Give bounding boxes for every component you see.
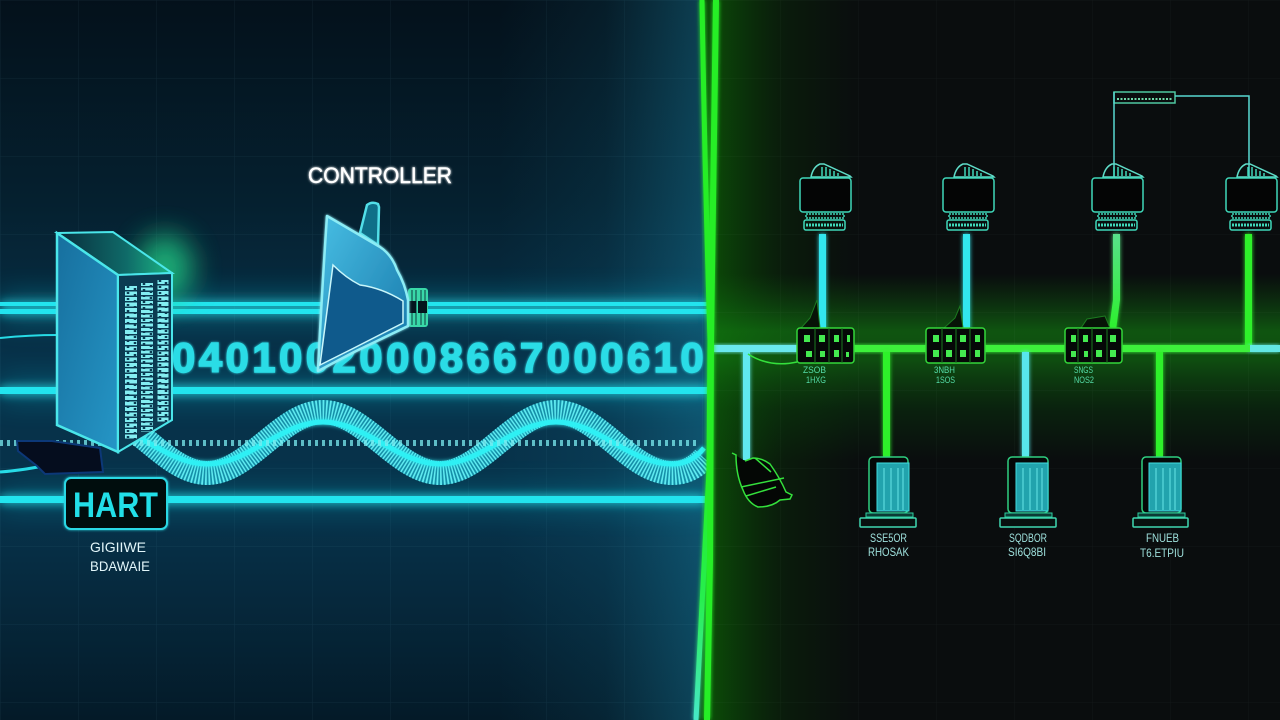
field device 2 (1000, 457, 1056, 527)
switch labels (803, 365, 1094, 385)
divider: glowing split between panels (696, 0, 716, 720)
switch labels: 3NBH (934, 365, 955, 375)
switch 2 with terminals (926, 306, 985, 363)
switch labels: SNGS (1074, 365, 1093, 375)
switch labels: ZSOB (803, 365, 826, 375)
vertical drops from bus to workstations (819, 234, 1252, 348)
signal rails (0, 302, 708, 503)
horizontal fieldbus trunk (712, 345, 1280, 352)
workstation 2 (943, 164, 994, 230)
field device labels (868, 531, 1184, 560)
switch labels: NOS2 (1074, 375, 1094, 385)
caption under HART badge: BDAWAIE (90, 558, 150, 574)
field device labels: FNUEB (1146, 531, 1179, 545)
top bracket link (1114, 92, 1249, 178)
badge: HART (65, 478, 167, 529)
panel: fieldbus network (696, 0, 1280, 720)
switch labels: 1HXG (806, 375, 826, 385)
switch 1 with terminals (797, 300, 854, 363)
icon: controller valve funnel (318, 203, 428, 371)
switch 3 with terminals (1065, 316, 1122, 363)
field device labels: SQDBOR (1009, 531, 1047, 545)
dark connector block (0, 441, 103, 474)
field device labels: T6.ETPIU (1140, 546, 1184, 560)
field device labels: RHOSAK (868, 545, 909, 559)
field device 1 (860, 457, 916, 527)
digital data digits: 04010020008667000610 (172, 334, 707, 381)
workstation 3 (1092, 164, 1143, 230)
caption under HART badge: GIGIIWE (90, 539, 146, 555)
icon: HART device enclosure (57, 232, 193, 452)
switch labels: 1SOS (936, 375, 955, 385)
vertical drops from bus to field devices (743, 352, 1163, 460)
input wire (0, 335, 58, 338)
workstation 1 (800, 164, 851, 230)
field device labels: SSE5OR (870, 531, 907, 545)
field device 3 (1133, 457, 1188, 527)
field device labels: SI6Q8BI (1008, 545, 1046, 559)
workstation 4 (1226, 164, 1277, 230)
panel: HART analog and digital signalling (0, 0, 712, 720)
analog sine wave with data row (0, 412, 704, 473)
icon: sensor probe (732, 354, 797, 507)
caption under HART badge (90, 539, 150, 574)
heading: controller label: CONTROLLER (308, 163, 452, 188)
badge: HART: HART (73, 486, 158, 525)
